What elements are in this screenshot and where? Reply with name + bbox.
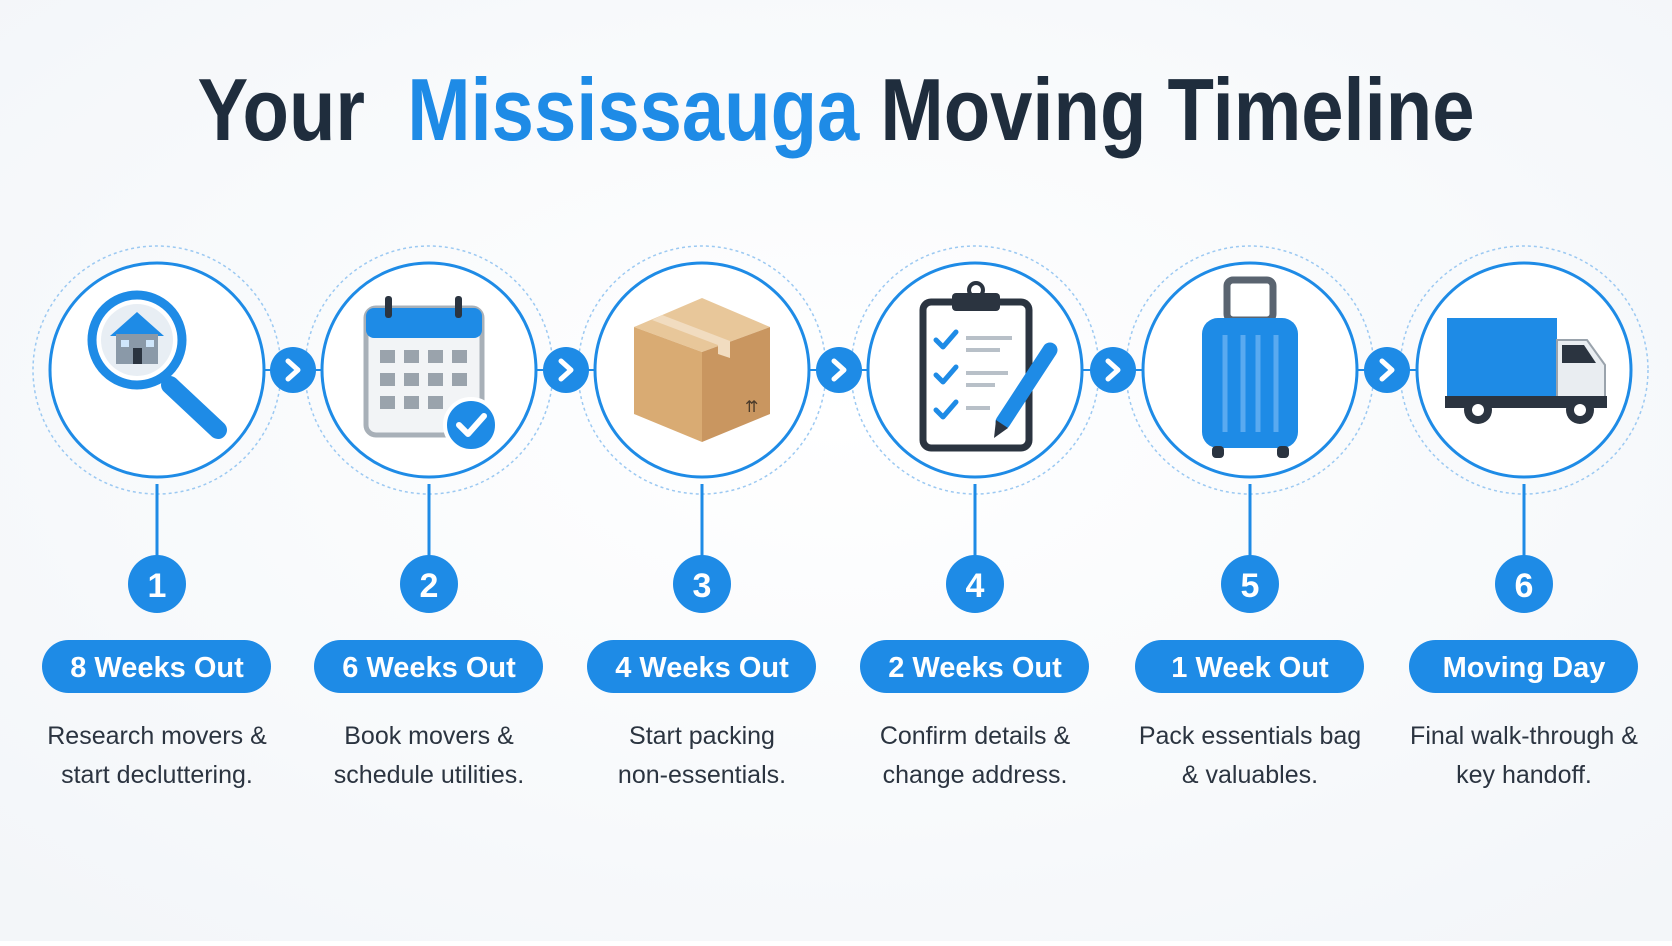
icon: box: ⇈ bbox=[745, 399, 758, 416]
icon: box bbox=[634, 298, 770, 442]
step 3: 4 Weeks Out bbox=[615, 652, 789, 684]
step 1 bbox=[33, 246, 281, 789]
step 1: 1 bbox=[148, 567, 166, 605]
step 3 bbox=[578, 246, 826, 789]
step 4 bbox=[851, 246, 1099, 789]
step 6 bbox=[1400, 246, 1648, 789]
icon: truck bbox=[1445, 318, 1607, 424]
step 6: Final walk-through & bbox=[1410, 722, 1638, 750]
icon: magnifier house bbox=[92, 295, 218, 430]
step 5: 1 Week Out bbox=[1171, 652, 1329, 684]
title: Your Mississauga Moving Timeline bbox=[198, 60, 1474, 159]
step 5: 5 bbox=[1241, 567, 1259, 605]
step 6: 6 bbox=[1515, 567, 1533, 605]
step 2: 6 Weeks Out bbox=[342, 652, 516, 684]
timeline connector line bbox=[250, 369, 1420, 371]
step 4: change address. bbox=[883, 761, 1067, 789]
step 2: schedule utilities. bbox=[334, 761, 524, 789]
step 3: 3 bbox=[693, 567, 711, 605]
step 4: Confirm details & bbox=[880, 722, 1070, 750]
step 2: 2 bbox=[420, 567, 438, 605]
icon: suitcase bbox=[1202, 280, 1298, 458]
step 3: Start packing bbox=[629, 722, 775, 750]
step 2: Book movers & bbox=[344, 722, 514, 750]
step 6: Moving Day bbox=[1443, 652, 1605, 684]
step 4: 2 Weeks Out bbox=[888, 652, 1062, 684]
step 3: non-essentials. bbox=[618, 761, 786, 789]
step 5: Pack essentials bag bbox=[1139, 722, 1361, 750]
step 1: start decluttering. bbox=[61, 761, 253, 789]
step 5 bbox=[1126, 246, 1374, 789]
step 6: key handoff. bbox=[1456, 761, 1592, 789]
step 1: 8 Weeks Out bbox=[70, 652, 244, 684]
step 1: Research movers & bbox=[47, 722, 267, 750]
icon: calendar bbox=[366, 296, 497, 451]
icon: clipboard bbox=[923, 283, 1050, 448]
step 2 bbox=[305, 246, 553, 789]
step 4: 4 bbox=[966, 567, 985, 605]
step 5: & valuables. bbox=[1182, 761, 1318, 789]
arrows: chevrons between steps bbox=[270, 347, 1410, 393]
